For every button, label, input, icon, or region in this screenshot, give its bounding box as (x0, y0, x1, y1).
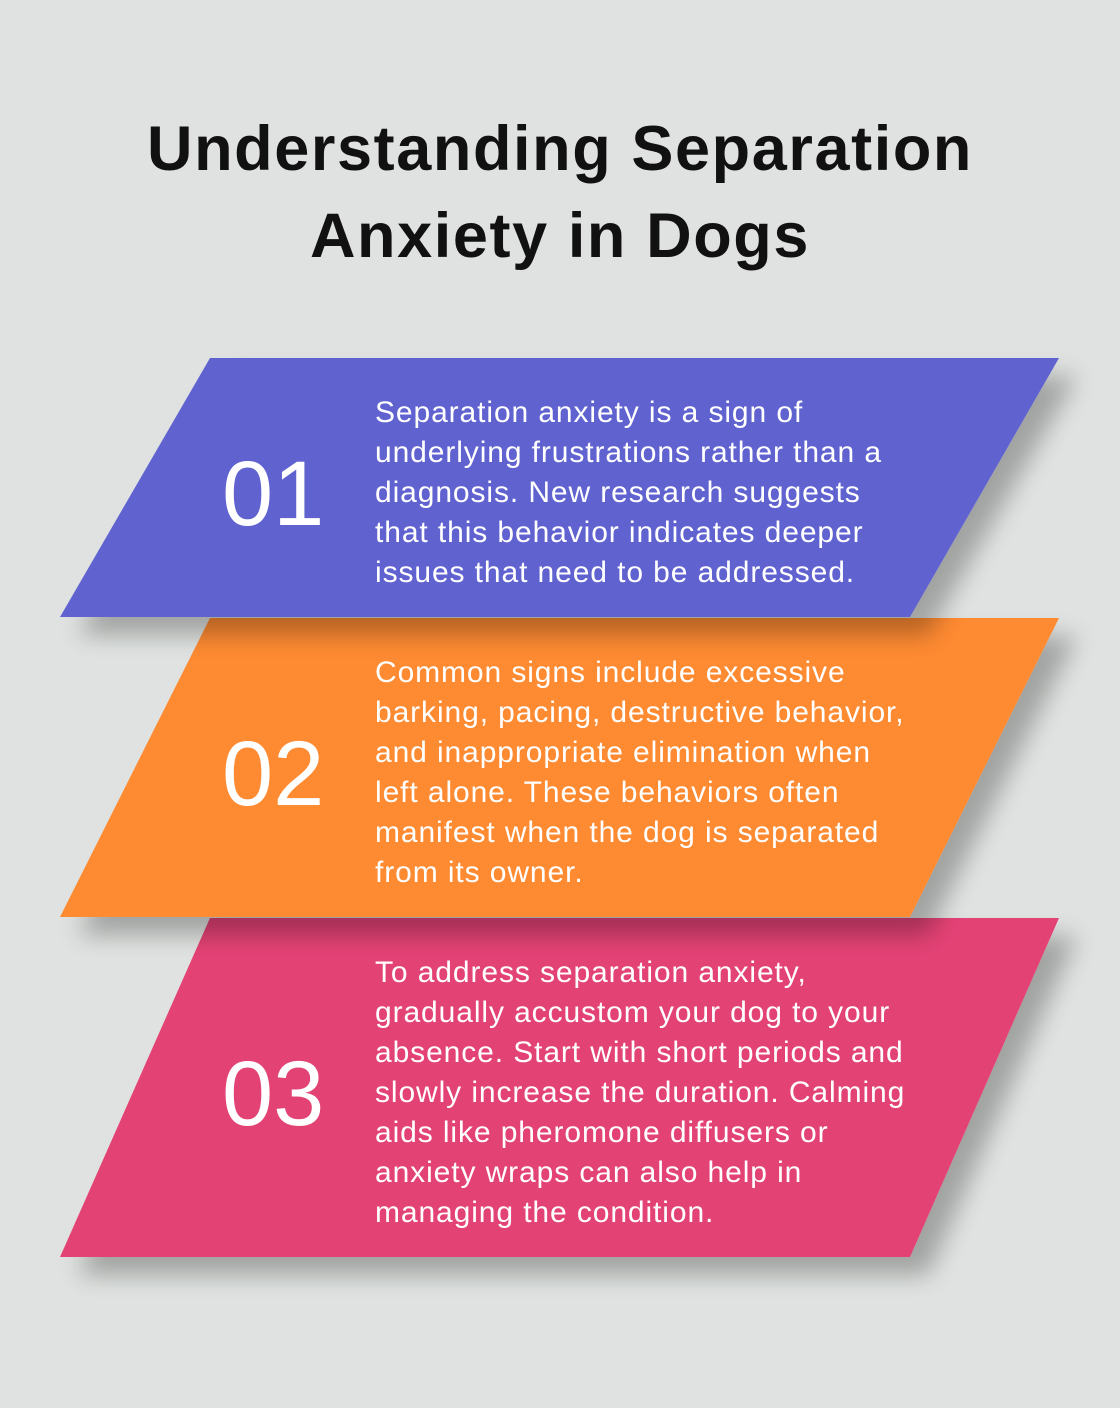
text block 03: slowly increase the duration. Calming (375, 1076, 905, 1109)
text block 02: from its owner. (375, 856, 584, 889)
title: Understanding Separation (147, 114, 973, 184)
text block 03: aids like pheromone diffusers or (375, 1116, 828, 1149)
text block 02: manifest when the dog is separated (375, 816, 879, 849)
text block 01: Separation anxiety is a sign of (375, 396, 803, 429)
title: Anxiety in Dogs (310, 201, 810, 271)
number 01: 01 (222, 443, 324, 545)
text block 01: issues that need to be addressed. (375, 556, 855, 589)
panel: 03 (60, 918, 1059, 1257)
text block 02: and inappropriate elimination when (375, 736, 871, 769)
text block 01: diagnosis. New research suggests (375, 476, 861, 509)
text block 01: that this behavior indicates deeper (375, 516, 863, 549)
panel: 01 (60, 358, 1059, 617)
text block 03: To address separation anxiety, (375, 956, 807, 989)
number 03: 03 (222, 1043, 324, 1145)
text block 02: left alone. These behaviors often (375, 776, 839, 809)
text block 03: managing the condition. (375, 1196, 714, 1229)
number 02: 02 (222, 723, 324, 825)
text block 02: Common signs include excessive (375, 656, 846, 689)
title (147, 114, 973, 271)
text block 03: anxiety wraps can also help in (375, 1156, 802, 1189)
panel: 02 (60, 618, 1059, 917)
text block 01: underlying frustrations rather than a (375, 436, 882, 469)
text block 02: barking, pacing, destructive behavior, (375, 696, 904, 729)
text block 03: gradually accustom your dog to your (375, 996, 890, 1029)
text block 03: absence. Start with short periods and (375, 1036, 904, 1069)
